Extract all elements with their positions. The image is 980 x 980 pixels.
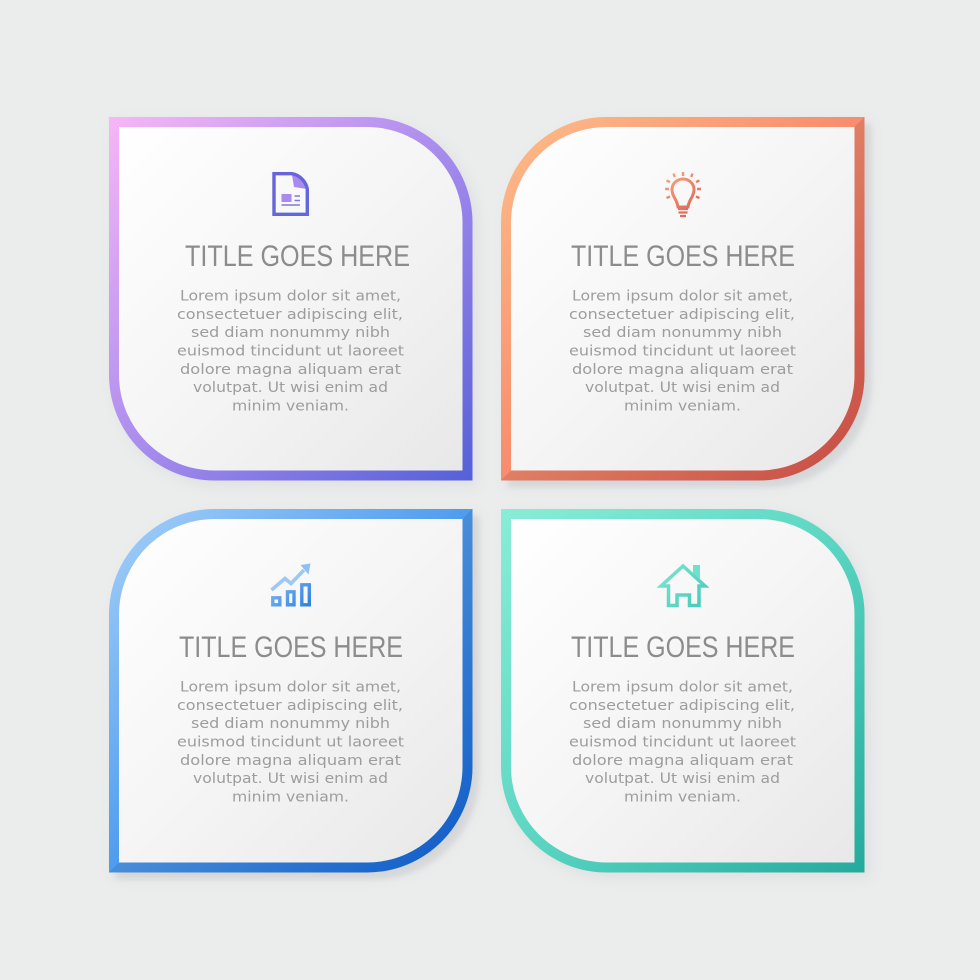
body text: dolore magna aliquam erat: [180, 362, 402, 378]
body text: minim veniam.: [232, 790, 349, 806]
body text: sed diam nonummy nibh: [583, 716, 782, 732]
panel: bottom-left card: [109, 509, 480, 880]
card inner surface: [511, 127, 854, 470]
body text: minim veniam.: [624, 790, 741, 806]
title: TITLE GOES HERE: [571, 631, 795, 664]
card inner surface: [119, 127, 462, 470]
body text: Lorem ipsum dolor sit amet,: [572, 680, 793, 696]
body text: sed diam nonummy nibh: [191, 325, 390, 341]
card inner surface: [119, 519, 462, 862]
body text: euismod tincidunt ut laoreet: [177, 344, 405, 360]
border shade on right and bottom edges: [501, 117, 864, 480]
body text: Lorem ipsum dolor sit amet,: [572, 288, 793, 304]
panel: bottom-right card: [501, 509, 870, 878]
body text: euismod tincidunt ut laoreet: [569, 734, 797, 750]
body text: minim veniam.: [624, 398, 741, 414]
body text: minim veniam.: [232, 398, 349, 414]
body text: volutpat. Ut wisi enim ad: [585, 771, 780, 787]
icon: document: [274, 174, 307, 214]
border shade on right and bottom edges: [109, 509, 472, 872]
body text: consectetuer adipiscing elit,: [177, 698, 403, 714]
icon: light bulb: [665, 172, 701, 216]
body text: euismod tincidunt ut laoreet: [569, 344, 797, 360]
title: TITLE GOES HERE: [185, 240, 410, 273]
card border: orange gradient: [501, 117, 864, 480]
body text: euismod tincidunt ut laoreet: [177, 734, 405, 750]
body text: Lorem ipsum dolor sit amet,: [180, 288, 401, 304]
body text: [177, 288, 405, 414]
card border: teal gradient: [501, 509, 864, 872]
icon: house: [661, 565, 705, 606]
body text: consectetuer adipiscing elit,: [569, 307, 795, 323]
body text: sed diam nonummy nibh: [191, 716, 390, 732]
body text: dolore magna aliquam erat: [572, 362, 794, 378]
body text: consectetuer adipiscing elit,: [177, 307, 403, 323]
body text: volutpat. Ut wisi enim ad: [585, 380, 780, 396]
body text: consectetuer adipiscing elit,: [569, 698, 795, 714]
panel: top-right card: [501, 117, 872, 488]
card border: purple gradient: [109, 117, 472, 480]
body text: [569, 288, 797, 414]
icon: growth chart: [272, 564, 310, 605]
title: TITLE GOES HERE: [179, 631, 403, 664]
title: TITLE GOES HERE: [571, 240, 795, 273]
body text: Lorem ipsum dolor sit amet,: [180, 680, 401, 696]
card border: blue gradient: [109, 509, 472, 872]
body text: [569, 680, 797, 806]
body text: [177, 680, 405, 806]
panel: top-left card: [109, 117, 478, 486]
body text: dolore magna aliquam erat: [180, 753, 402, 769]
body text: dolore magna aliquam erat: [572, 753, 794, 769]
body text: volutpat. Ut wisi enim ad: [193, 380, 388, 396]
body text: sed diam nonummy nibh: [583, 325, 782, 341]
card inner surface: [511, 519, 854, 862]
body text: volutpat. Ut wisi enim ad: [193, 771, 388, 787]
